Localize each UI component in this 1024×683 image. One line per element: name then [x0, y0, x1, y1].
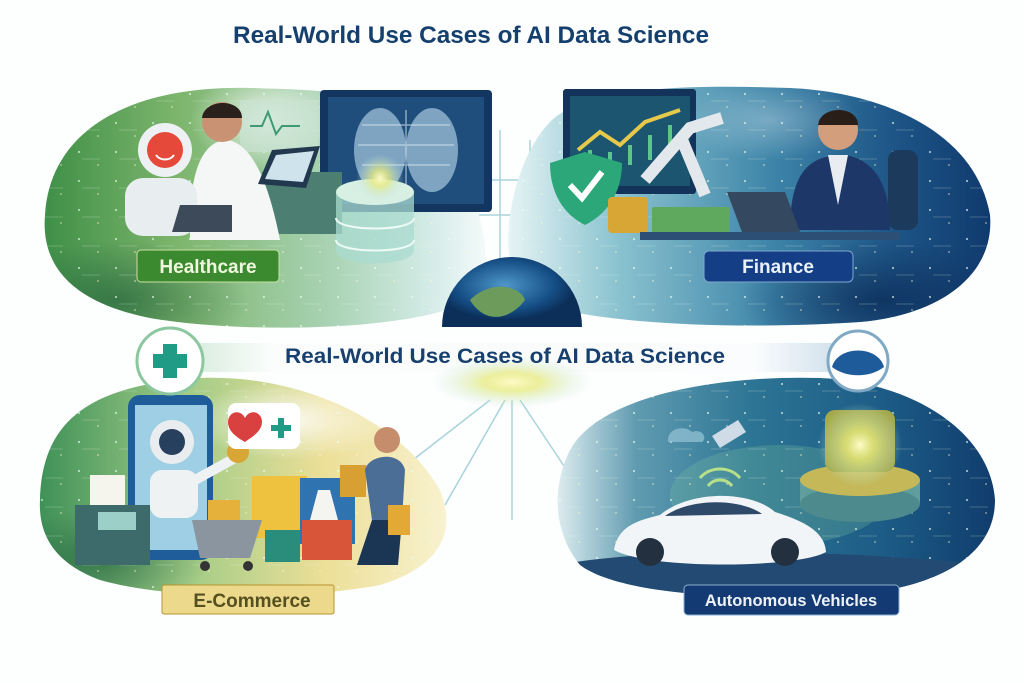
- wifi signal: [700, 469, 740, 486]
- cloud: [668, 428, 704, 442]
- small chart screen: [240, 100, 318, 152]
- subtitle: Real-World Use Cases of AI Data Science: [285, 345, 725, 368]
- label: e-commerce: E-Commerce: [193, 591, 311, 612]
- data cylinder: [336, 154, 414, 264]
- laptop: [172, 205, 232, 232]
- analyst: [790, 110, 890, 230]
- label: autonomous vehicles: Autonomous Vehicles: [705, 592, 877, 610]
- icon: medical cross: [137, 328, 203, 394]
- label: autonomous vehicles: [684, 585, 899, 615]
- laptop: [727, 192, 800, 232]
- shopping bags: [252, 465, 366, 562]
- tablet: [258, 146, 320, 188]
- background texture: [45, 88, 469, 327]
- money stack: [652, 207, 730, 240]
- label: finance: Finance: [742, 257, 814, 278]
- stock chart screen: [563, 89, 696, 194]
- label: healthcare: [137, 250, 279, 282]
- panel: healthcare: [44, 88, 492, 328]
- satellite: [712, 420, 746, 448]
- background texture: [559, 382, 988, 560]
- title: Real-World Use Cases of AI Data Science: [233, 22, 709, 49]
- phone with robot: [128, 395, 249, 560]
- panel: e-commerce: [40, 378, 446, 614]
- shopping cart: [192, 500, 262, 571]
- chair: [888, 150, 918, 230]
- hologram ai platform: [800, 403, 920, 522]
- doctor: [190, 102, 280, 240]
- shopper: [357, 427, 410, 565]
- road: [577, 554, 961, 593]
- label: e-commerce: [162, 585, 334, 614]
- payment terminal: [75, 475, 150, 565]
- background texture: [41, 382, 413, 591]
- center band: [165, 343, 860, 408]
- background texture: [522, 87, 988, 326]
- heart badge: [228, 403, 300, 449]
- robot: [125, 123, 197, 236]
- globe: [442, 257, 582, 327]
- monitor: lung x-ray: [320, 90, 492, 212]
- label: healthcare: Healthcare: [159, 257, 257, 278]
- panel: finance: [508, 86, 990, 326]
- central connector lines: [400, 130, 580, 520]
- check mark: [570, 172, 602, 198]
- icon: car badge: [828, 331, 888, 391]
- panel: autonomous vehicles: [550, 375, 1000, 615]
- coin stack: [608, 197, 648, 233]
- label: finance: [704, 251, 853, 282]
- robot arm: [645, 118, 722, 195]
- desk: [262, 172, 342, 234]
- shield: [550, 152, 622, 225]
- car: [614, 496, 826, 566]
- desk: [640, 232, 900, 240]
